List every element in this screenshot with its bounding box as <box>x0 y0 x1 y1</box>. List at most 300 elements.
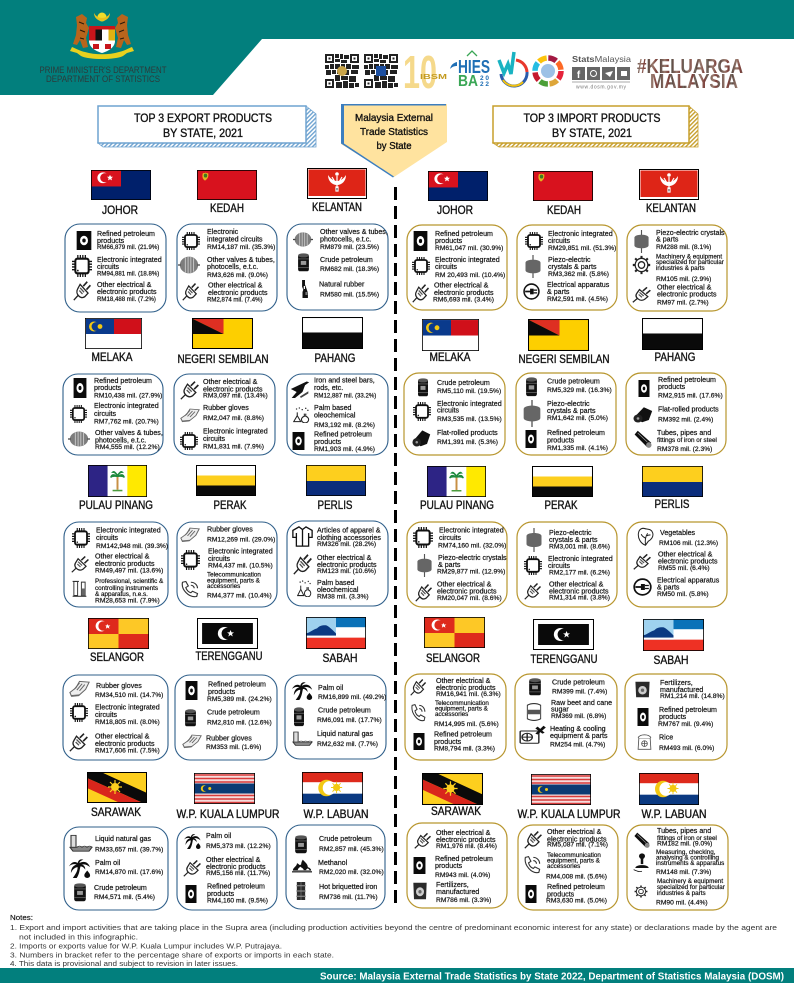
panel: Terengganu imports: Heating & cooling <box>550 725 606 733</box>
panel: Selangor exports: RM17,606 mil. (7.5%) <box>95 748 160 754</box>
QR code: coat of arms <box>325 54 359 88</box>
panel: Pahang imports: Tubes, pipes and <box>657 429 711 437</box>
state: Perlis (export): PERLIS <box>318 498 352 512</box>
panel: Selangor imports: Other electrical & <box>436 677 491 685</box>
panel: Negeri Sembilan exports: electronic products <box>203 386 263 394</box>
panel: Sarawak exports: RM4,571 mil. (5.4%) <box>94 894 155 901</box>
notes <box>10 913 777 968</box>
panel: Kelantan exports: Other valves & tubes, <box>320 228 388 236</box>
logo: Keluarga Malaysia: MALAYSIA <box>650 71 738 93</box>
panel: Selangor exports: circuits <box>95 711 118 719</box>
panel: Negeri Sembilan imports: RM5,329 mil. (16.3%) <box>547 387 612 394</box>
panel: Perlis exports: RM38 mil. (3.3%) <box>317 594 369 600</box>
panel: W.P. Kuala Lumpur imports: Telecommunication <box>547 852 601 859</box>
panel: Selangor imports: RM14,995 mil. (5.6%) <box>434 721 499 728</box>
panel: Johor imports: circuits <box>435 263 458 271</box>
heading box: top 3 export: TOP 3 EXPORT PRODUCTS <box>134 111 272 125</box>
panel: Negeri Sembilan imports: crystals & parts <box>547 407 596 415</box>
panel: Pahang imports: RM392 mil. (2.4%) <box>658 416 713 424</box>
panel: Sarawak exports: Palm oil <box>95 859 121 867</box>
panel: Pulau Pinang exports: electronic products <box>95 560 155 568</box>
state: Kedah (export) <box>197 170 257 215</box>
panel: Selangor imports: RM8,794 mil. (3.3%) <box>434 746 495 752</box>
panel: Melaka exports: RM7,762 mil. (20.7%) <box>94 418 159 426</box>
state: Johor (export) <box>91 170 151 217</box>
icon: coat of arms <box>70 12 134 59</box>
panel: Melaka exports: RM4,555 mil. (12.2%) <box>95 444 160 451</box>
panel: Kedah imports: & parts <box>547 288 570 296</box>
panel: Pulau Pinang imports: Piezo-electric crystals <box>438 554 507 562</box>
panel: Melaka exports: Other valves & tubes, <box>95 429 163 437</box>
panel: Sabah imports: Fertilizers, <box>660 679 693 687</box>
panel: W.P. Kuala Lumpur exports <box>177 827 277 910</box>
panel: Perlis exports: clothing accessories <box>317 534 381 542</box>
notes: Notes: <box>10 913 33 922</box>
panel: Terengganu imports: RM399 mil. (7.4%) <box>552 688 607 696</box>
panel: Negeri Sembilan imports: RM1,335 mil. (4.1%) <box>547 445 608 452</box>
logo: SDG wheel <box>535 58 561 84</box>
panel: Perlis imports <box>627 522 727 607</box>
panel: W.P. Labuan imports: Tubes, pipes and <box>657 827 711 835</box>
panel: W.P. Labuan exports: Hot briquetted iron <box>319 883 377 891</box>
logo: StatsMalaysia social: f <box>577 70 581 81</box>
heading box: top 3 import <box>493 106 698 147</box>
panel: Pahang imports: products <box>658 383 686 391</box>
panel: Sabah exports: RM6,091 mil. (17.7%) <box>317 717 382 724</box>
panel: Melaka imports: Crude petroleum <box>437 379 490 387</box>
panel: W.P. Labuan imports: Measuring, checking, <box>656 849 716 856</box>
panel: W.P. Labuan imports: instruments & apparatus <box>656 860 724 867</box>
panel: Perlis imports: RM106 mil. (12.3%) <box>659 540 718 547</box>
panel: Johor imports: RM 20,493 mil. (10.4%) <box>435 272 505 279</box>
state: Selangor (export) <box>88 618 149 664</box>
state: Sabah (export): SABAH <box>322 651 358 665</box>
panel: Sarawak exports <box>64 827 168 910</box>
panel: Pahang exports: RM1,903 mil. (4.9%) <box>314 446 375 453</box>
panel: Melaka exports <box>63 374 163 455</box>
department name <box>40 65 167 84</box>
panel: Terengganu exports: RM5,389 mil. (24.2%) <box>207 696 272 703</box>
state: W.P. Kuala Lumpur (import) <box>518 774 621 821</box>
panel: Perlis imports: Electrical apparatus <box>657 576 720 584</box>
panel: Kedah imports: Electronic integrated <box>548 230 613 238</box>
panel: Kelantan imports: RM105 mil. (2.9%) <box>656 276 711 283</box>
state: Selangor (import) <box>424 617 485 665</box>
panel: Kedah exports: integrated circuits <box>207 236 263 244</box>
panel: Johor exports: RM66,879 mil. (21.9%) <box>97 244 159 251</box>
panel: Pulau Pinang exports: Professional, scientific & <box>95 578 164 585</box>
panel: Perak imports: RM1,314 mil. (3.8%) <box>549 594 610 602</box>
state: Melaka (import): MELAKA <box>430 350 470 364</box>
panel: Johor imports: Other electrical & <box>434 282 489 290</box>
state: Negeri Sembilan (import) <box>518 319 610 366</box>
logo: HIES BA 2022 <box>450 51 490 90</box>
panel: Pahang exports: products <box>314 438 342 446</box>
panel: W.P. Labuan imports: RM148 mil. (7.3%) <box>656 869 711 876</box>
panel: Perak imports: Other electrical & <box>549 580 604 588</box>
state: W.P. Kuala Lumpur (import): W.P. KUALA LUMPUR <box>518 807 621 821</box>
panel: Sarawak imports: RM1,976 mil. (8.4%) <box>436 843 497 850</box>
panel: Johor exports: RM18,488 mil. (7.2%) <box>97 296 156 303</box>
panel: Perak imports: Piezo-electric <box>549 529 592 537</box>
state: W.P. Labuan (export): W.P. LABUAN <box>304 807 368 821</box>
panel: Melaka imports: Flat-rolled products <box>437 429 498 437</box>
panel: W.P. Kuala Lumpur exports: RM4,160 mil. (9.5%) <box>207 898 268 904</box>
panel: Pahang imports <box>626 373 726 455</box>
panel: W.P. Kuala Lumpur imports: equipment, parts & <box>547 858 601 864</box>
panel: W.P. Kuala Lumpur exports: Refined petroleum <box>207 882 265 890</box>
panel: Sabah exports: Palm oil <box>318 684 344 692</box>
panel: Perlis imports: electronic products <box>658 558 718 566</box>
panel: Kedah imports: RM2,591 mil. (4.5%) <box>547 296 608 303</box>
panel: Sabah imports: RM1,214 mil. (14.8%) <box>660 693 725 700</box>
central dashed divider <box>394 187 397 905</box>
panel: Melaka exports: Electronic integrated <box>94 402 159 410</box>
logo: census emblem <box>499 52 527 86</box>
panel: Johor exports: circuits <box>97 263 120 271</box>
panel: Terengganu imports: RM369 mil. (6.8%) <box>551 713 606 720</box>
panel: Perlis imports: RM55 mil. (6.4%) <box>658 565 710 572</box>
panel: W.P. Labuan imports: industries & parts <box>657 890 706 897</box>
panel: Kelantan imports: Other electrical & <box>657 284 712 292</box>
panel: W.P. Kuala Lumpur imports: RM4,008 mil. (5.6%) <box>546 874 607 880</box>
notes: 2. Imports or exports value for W.P. Kuala Lumpur includes W.P. Putrajaya. <box>10 942 282 950</box>
panel: Negeri Sembilan exports: Other electrical & <box>203 378 258 386</box>
panel: Sabah exports: RM16,899 mil. (49.2%) <box>318 694 386 701</box>
panel: W.P. Kuala Lumpur imports: Refined petroleum <box>547 883 605 891</box>
logo: HIES BA 2022: HIES <box>458 57 490 77</box>
panel: Johor imports: RM61,047 mil. (30.9%) <box>435 245 503 252</box>
panel: Sabah imports <box>625 674 727 760</box>
panel: Pulau Pinang imports: Electronic integrated <box>439 526 504 534</box>
panel: Sarawak imports: RM786 mil. (3.3%) <box>436 897 491 904</box>
panel: Perak imports: circuits <box>548 562 571 570</box>
panel: Terengganu exports: Rubber gloves <box>206 734 252 742</box>
panel: Perak exports: Rubber gloves <box>207 526 253 534</box>
panel: W.P. Labuan exports: RM2,857 mil. (45.3%) <box>319 846 384 853</box>
state: Melaka (export) <box>85 318 142 364</box>
panel: W.P. Labuan exports: RM736 mil. (11.7%) <box>319 894 378 901</box>
panel: Perlis exports: Other electrical & <box>317 554 372 562</box>
state: Sabah (import): SABAH <box>654 653 688 667</box>
logo: 10 years: 10 <box>403 46 437 98</box>
panel: Negeri Sembilan imports: Crude petroleum <box>547 378 600 386</box>
state: Kelantan (export): KELANTAN <box>312 200 362 214</box>
panel: Kedah imports: RM29,851 mil. (51.3%) <box>548 245 616 252</box>
state: Perlis (import) <box>642 466 703 511</box>
panel: Perlis exports: electronic products <box>317 561 377 569</box>
panel: Pahang imports: RM378 mil. (2.3%) <box>657 446 712 453</box>
state: Johor (import): JOHOR <box>437 203 473 217</box>
panel: Perak imports: RM2,177 mil. (6.2%) <box>549 570 610 576</box>
logo: 10 years: IBSM <box>420 74 447 81</box>
panel: Johor imports: electronic products <box>434 289 494 297</box>
panel: Sabah exports: Liquid natural gas <box>317 730 373 738</box>
panel: W.P. Kuala Lumpur exports: Palm oil <box>206 832 232 840</box>
state: Selangor (export): SELANGOR <box>90 650 144 664</box>
panel: Kedah exports: electronic products <box>208 289 268 297</box>
logo: HIES BA 2022: BA <box>458 73 478 90</box>
state: Terengganu (export) <box>196 618 262 663</box>
panel: Pulau Pinang exports: RM49,497 mil. (13.6%) <box>95 568 163 574</box>
panel: Perlis exports: Palm based <box>317 579 355 587</box>
panel: Pulau Pinang imports: electronic products <box>437 588 497 596</box>
panel: W.P. Kuala Lumpur exports: electronic products <box>206 863 266 871</box>
panel: Kedah exports: RM3,626 mil. (9.0%) <box>207 272 268 279</box>
panel: Melaka exports: photocells, e.t.c. <box>95 436 146 444</box>
panel: Selangor imports: accessories <box>435 711 468 718</box>
panel: Pahang exports: oleochemical <box>314 412 356 420</box>
panel: Terengganu exports: Refined petroleum <box>208 680 266 688</box>
panel: Melaka imports <box>404 373 505 455</box>
panel: Kelantan imports: electronic products <box>657 290 717 298</box>
panel: Kelantan imports: specialized for particular <box>656 259 724 266</box>
QR code: Facebook <box>364 54 398 88</box>
panel: Melaka imports: RM5,110 mil. (19.5%) <box>437 388 501 395</box>
panel: Selangor exports: RM18,805 mil. (8.0%) <box>95 719 160 726</box>
state: W.P. Labuan (import) <box>639 773 706 821</box>
panel: Melaka exports: products <box>94 384 122 392</box>
state: Perak (export): PERAK <box>214 498 246 512</box>
state: Sabah (export) <box>306 617 366 665</box>
panel: Kedah exports: Electronic <box>207 228 239 236</box>
panel: W.P. Kuala Lumpur imports: RM5,087 mil. (7.1%) <box>547 842 608 848</box>
panel: Pulau Pinang exports: & apparatus, n.e.s. <box>95 591 148 598</box>
state: Sabah (import) <box>643 619 704 667</box>
state: Sarawak (export): SARAWAK <box>91 805 141 819</box>
state: Pulau Pinang (export) <box>79 465 153 512</box>
state: Perak (export) <box>196 465 256 512</box>
title pentagon: by State <box>376 140 412 152</box>
panel: Perak exports: Telecommunication <box>207 572 261 578</box>
panel: Selangor exports: Other electrical & <box>95 732 150 740</box>
state: Pulau Pinang (import): PULAU PINANG <box>420 498 494 512</box>
panel: Terengganu imports: RM254 mil. (4.7%) <box>550 742 605 748</box>
panel: W.P. Labuan exports: Crude petroleum <box>319 835 372 843</box>
panel: W.P. Labuan exports: RM2,020 mil. (32.0%) <box>319 869 384 876</box>
panel: Pahang imports: Flat-rolled products <box>658 406 719 414</box>
panel: Negeri Sembilan imports: Piezo-electric <box>547 400 590 408</box>
panel: Pulau Pinang exports: Other electrical & <box>95 552 150 560</box>
panel: Negeri Sembilan exports: RM3,097 mil. (13.4%) <box>203 392 268 400</box>
header band <box>0 0 794 95</box>
panel: Sarawak exports: Liquid natural gas <box>95 835 151 843</box>
panel: Perak imports: Electronic integrated <box>548 555 613 563</box>
panel: Perak imports: crystals & parts <box>549 536 598 544</box>
panel: Kedah imports: Piezo-electric <box>548 256 591 264</box>
panel: Kelantan exports: RM879 mil. (23.5%) <box>320 244 379 251</box>
panel: W.P. Labuan imports: RM90 mil. (4.4%) <box>656 900 708 906</box>
heading box: top 3 export: BY STATE, 2021 <box>163 126 243 140</box>
panel: Negeri Sembilan imports: RM1,642 mil. (5.0%) <box>547 415 608 422</box>
state: Kelantan (export) <box>307 168 367 214</box>
panel: Kedah exports: RM14,187 mil. (35.3%) <box>207 244 275 251</box>
panel: Pulau Pinang exports <box>64 522 168 607</box>
panel: Selangor imports: products <box>434 738 462 746</box>
state: Negeri Sembilan (export) <box>178 318 268 366</box>
panel: Kedah exports <box>177 224 277 311</box>
panel: Sarawak imports: Fertilizers, <box>436 881 469 889</box>
panel: Perak exports: Electronic integrated <box>208 548 273 556</box>
panel: Selangor exports <box>63 675 168 760</box>
logo: HIES BA 2022: 20 <box>480 75 489 82</box>
panel: Sabah imports: Refined petroleum <box>659 706 717 714</box>
panel: Selangor imports: Refined petroleum <box>434 730 492 738</box>
state: Melaka (export): MELAKA <box>92 350 132 364</box>
panel: Pulau Pinang imports: circuits <box>439 534 462 542</box>
title pentagon: Trade Statistics <box>360 126 428 138</box>
logo: HIES BA 2022: 22 <box>480 81 489 88</box>
panel: Perak exports <box>177 522 277 607</box>
logo: Keluarga Malaysia <box>637 56 743 93</box>
panel: Johor exports: Refined petroleum <box>97 230 155 238</box>
state: Johor (import) <box>428 171 488 217</box>
panel: Kedah exports: RM2,874 mil. (7.4%) <box>207 296 263 304</box>
state: Pahang (import): PAHANG <box>654 350 696 364</box>
panel: Perak imports: electronic products <box>549 588 609 596</box>
panel: Sabah exports: RM2,632 mil. (7.7%) <box>317 741 378 748</box>
state: Sarawak (export) <box>87 772 147 819</box>
panel: Pulau Pinang imports: & parts <box>438 561 461 569</box>
panel: Sarawak imports: RM943 mil. (4.0%) <box>435 872 490 879</box>
state: W.P. Kuala Lumpur (export): W.P. KUALA LUMPUR <box>176 807 280 821</box>
panel: Johor exports: Other electrical & <box>97 281 152 289</box>
panel: Selangor exports: Electronic integrated <box>95 704 160 712</box>
panel: Kelantan exports: RM682 mil. (18.3%) <box>320 266 379 273</box>
panel: Sabah imports: RM493 mil. (6.0%) <box>659 745 714 752</box>
panel: Sabah exports <box>285 675 386 759</box>
panel: Pulau Pinang imports: RM74,160 mil. (32.0%) <box>438 542 506 550</box>
panel: Terengganu exports: products <box>208 688 236 696</box>
panel: Johor imports: Electronic integrated <box>435 256 500 264</box>
department name: DEPARTMENT OF STATISTICS <box>46 74 160 84</box>
panel: Kelantan exports: Natural rubber <box>319 280 365 288</box>
panel: W.P. Kuala Lumpur imports: RM3,630 mil. (5.0%) <box>546 898 607 904</box>
panel: Terengganu exports <box>175 675 277 760</box>
panel: W.P. Labuan imports: specialized for particular <box>657 884 725 891</box>
panel: Perlis exports <box>287 521 388 606</box>
panel: Johor imports: products <box>435 237 463 245</box>
state: Pulau Pinang (import) <box>420 466 494 512</box>
state: Johor (export): JOHOR <box>102 203 138 217</box>
panel: Selangor imports <box>405 674 506 760</box>
panel: Negeri Sembilan exports <box>174 374 275 455</box>
panel: W.P. Labuan imports: RM182 mil. (9.0%) <box>657 840 712 848</box>
panel: Sabah imports: RM767 mil. (9.4%) <box>658 721 713 728</box>
state: Selangor (import): SELANGOR <box>426 651 480 665</box>
state: Kedah (import) <box>533 171 593 217</box>
panel: W.P. Kuala Lumpur exports: RM5,156 mil. (11.7%) <box>206 870 270 877</box>
panel: Pahang exports: Iron and steel bars, <box>314 376 375 384</box>
panel: Selangor exports: RM34,510 mil. (14.7%) <box>95 692 163 699</box>
panel: Sarawak exports: RM33,657 mil. (39.7%) <box>95 846 163 854</box>
panel: Johor imports: RM6,693 mil. (3.4%) <box>433 296 494 304</box>
panel: Terengganu imports: Crude petroleum <box>552 678 605 686</box>
panel: Pahang exports: Palm based <box>314 404 352 412</box>
panel: W.P. Labuan imports: analysing & controlling <box>656 854 720 862</box>
panel: Kelantan imports: Piezo-electric crystals <box>656 229 725 237</box>
panel: Terengganu exports: RM353 mil. (1.6%) <box>206 744 261 751</box>
panel: Pulau Pinang imports <box>407 522 507 607</box>
state: Kelantan (import) <box>639 169 699 215</box>
panel: Pulau Pinang imports: RM20,047 mil. (8.6%) <box>437 595 502 602</box>
panel: Melaka imports: circuits <box>437 406 460 414</box>
panel: Johor imports: Refined petroleum <box>435 230 493 238</box>
panel: Kelantan imports <box>627 225 727 311</box>
panel: W.P. Labuan imports <box>627 825 728 910</box>
panel: Melaka imports: RM3,535 mil. (13.5%) <box>437 416 502 423</box>
notes: 4. This data is provisional and subject to revision in later issues. <box>10 959 238 968</box>
panel: Johor exports: electronic products <box>97 288 157 296</box>
panel: Pahang exports: RM12,887 mil. (33.2%) <box>314 392 376 400</box>
panel: Sarawak imports: Refined petroleum <box>435 855 493 863</box>
state: Terengganu (import) <box>530 619 598 666</box>
panel: Kedah imports: RM3,362 mil. (5.8%) <box>548 271 609 278</box>
panel: W.P. Kuala Lumpur imports: products <box>547 890 575 898</box>
panel: Selangor exports: electronic products <box>95 740 155 748</box>
panel: Kedah imports: crystals & parts <box>548 263 597 271</box>
state: Kedah (import): KEDAH <box>547 203 581 217</box>
panel: Selangor imports: electronic products <box>436 684 496 692</box>
state: Kelantan (import): KELANTAN <box>646 201 696 215</box>
panel: Kedah imports: Electrical apparatus <box>547 281 610 289</box>
panel: Pulau Pinang exports: RM28,653 mil. (7.9%) <box>95 598 160 604</box>
state: Terengganu (export): TERENGGANU <box>196 649 262 663</box>
logo: Keluarga Malaysia: #KELUARGA <box>637 56 743 78</box>
state: Perlis (import): PERLIS <box>654 497 690 511</box>
panel: Negeri Sembilan exports: circuits <box>203 435 226 443</box>
panel: Perak exports: RM12,269 mil. (29.0%) <box>207 536 275 544</box>
state: Perak (import) <box>532 466 593 512</box>
panel: Johor exports: products <box>97 237 125 245</box>
panel: Pahang imports: Refined petroleum <box>658 376 716 384</box>
panel: Kelantan imports: industries & parts <box>656 265 705 272</box>
panel: Negeri Sembilan imports <box>516 373 616 455</box>
panel: Sabah imports: products <box>659 713 687 721</box>
panel: Kelantan imports: RM97 mil. (2.7%) <box>657 300 709 306</box>
panel: Perlis exports: RM326 mil. (28.2%) <box>317 541 376 548</box>
panel: Perlis exports: oleochemical <box>317 586 359 594</box>
panel: Perlis imports: Other electrical & <box>658 550 713 558</box>
state: Pahang (export) <box>302 317 363 365</box>
notes: 1. Export and import activities that are taking place in the Supra area (including production activities beyond the centre of predominant economic interest for any state) or declarations made by the agent are <box>10 923 777 932</box>
panel: Sarawak imports: Other electrical & <box>436 829 491 837</box>
notes: not included in this infographic. <box>19 932 138 942</box>
panel: Melaka exports: circuits <box>94 410 117 418</box>
panel: Perak imports <box>517 522 617 607</box>
panel: Selangor imports: equipment, parts & <box>435 706 489 712</box>
panel: Perlis exports: Articles of apparel & <box>317 526 381 534</box>
state: Melaka (import) <box>422 319 479 364</box>
panel: Perlis imports: Vegetables <box>660 529 696 537</box>
panel: Terengganu imports: Raw beet and cane <box>551 699 612 707</box>
panel: Terengganu imports: sugar <box>551 706 569 714</box>
panel: Johor imports <box>407 225 507 310</box>
panel: Terengganu exports: RM2,810 mil. (12.6%) <box>207 720 272 726</box>
state: Sarawak (import) <box>422 773 483 818</box>
panel: Terengganu exports: Crude petroleum <box>207 708 260 716</box>
state: Negeri Sembilan (import): NEGERI SEMBILAN <box>518 352 610 366</box>
panel: Negeri Sembilan exports: RM2,047 mil. (8.8%) <box>203 415 264 422</box>
panel: Negeri Sembilan exports: Rubber gloves <box>203 404 249 412</box>
heading box: top 3 import: TOP 3 IMPORT PRODUCTS <box>524 111 660 125</box>
panel: Terengganu imports: equipment & parts <box>550 732 608 740</box>
panel: Negeri Sembilan exports: RM1,831 mil. (7.9%) <box>203 444 264 450</box>
panel: Kelantan imports: Machinery & equipment <box>656 254 722 260</box>
state: Kedah (export): KEDAH <box>210 201 244 215</box>
panel: Kelantan exports: Crude petroleum <box>320 256 373 264</box>
panel: Sarawak exports: Crude petroleum <box>94 884 147 892</box>
